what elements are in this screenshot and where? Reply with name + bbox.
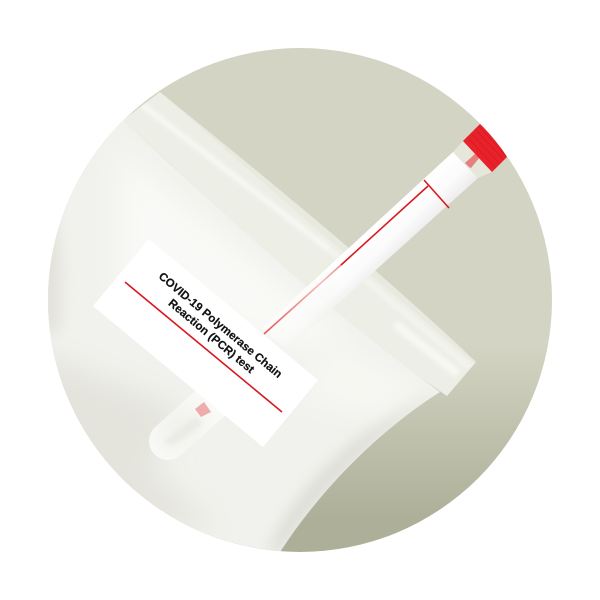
red line on sleeve <box>264 180 449 334</box>
tube sleeve <box>295 152 478 308</box>
label text second line: Reaction (PCR) test <box>166 297 256 376</box>
label <box>93 239 318 447</box>
label text: COVID-19 Polymerase Chain <box>156 271 284 381</box>
bag shading <box>48 188 400 551</box>
red cap <box>463 124 507 172</box>
illustration: PCR test tube in a bag <box>48 48 552 552</box>
label red line <box>125 282 282 412</box>
tube lower rounded end <box>163 384 232 446</box>
bag seal band <box>124 92 476 396</box>
bag body <box>30 120 440 560</box>
pink swab stem <box>465 154 479 168</box>
background circle <box>40 40 560 560</box>
test tube <box>163 124 507 446</box>
swab tip <box>195 402 211 417</box>
tube neck <box>453 141 492 178</box>
plastic bag <box>48 92 476 551</box>
